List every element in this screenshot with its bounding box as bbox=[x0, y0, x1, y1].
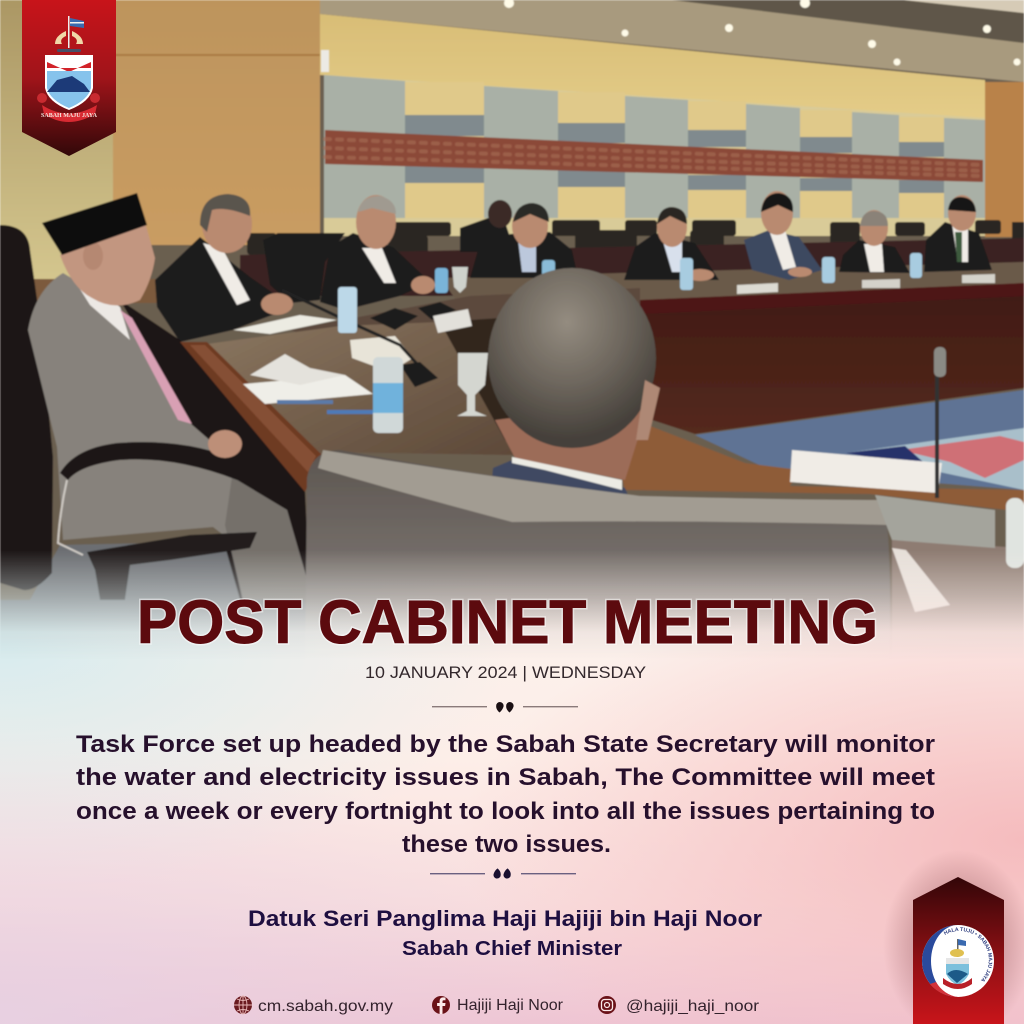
icon: round Hala Tuju emblem bbox=[922, 925, 994, 997]
speaker role: Sabah Chief Minister bbox=[402, 938, 622, 960]
footer: website bbox=[234, 996, 393, 1015]
far table bbox=[240, 238, 1024, 434]
footer: instagram bbox=[598, 996, 760, 1015]
near conference table bbox=[180, 288, 1024, 660]
dark area under near table bbox=[120, 300, 310, 600]
soft gradient background panel bbox=[0, 540, 1024, 1024]
quote text bbox=[76, 731, 935, 858]
foreground man from behind bbox=[488, 268, 660, 500]
top-left red banner with Sabah crest bbox=[22, 0, 116, 156]
opening quote divider bbox=[432, 702, 578, 712]
emblem motto: HALA TUJU • SABAH MAJU JAYA bbox=[944, 927, 992, 982]
documents and objects on table bbox=[233, 253, 995, 433]
quote text: these two issues. bbox=[402, 831, 611, 858]
quote text: the water and electricity issues in Sabah, The Committee will meet bbox=[76, 764, 935, 791]
people in the far row bbox=[155, 191, 992, 342]
footer: facebook: Hajiji Haji Noor bbox=[457, 997, 564, 1014]
icon: state crest bbox=[37, 16, 100, 122]
blue carpet and rug bbox=[0, 390, 1024, 660]
motto: SABAH MAJU JAYA bbox=[41, 113, 98, 119]
seated man in songkok bbox=[0, 193, 308, 600]
rear row of empty chairs bbox=[247, 220, 1024, 257]
carved wood frieze bbox=[325, 130, 983, 182]
microphone and name plate bbox=[790, 347, 1024, 568]
speaker name: Datuk Seri Panglima Haji Hajiji bin Haji Noor bbox=[248, 906, 762, 931]
title: POST CABINET MEETING bbox=[137, 588, 878, 656]
chair back bbox=[0, 225, 53, 590]
foreground chair back bbox=[305, 450, 890, 660]
ceiling lights bbox=[504, 0, 1020, 66]
date line: 10 JANUARY 2024 | WEDNESDAY bbox=[365, 663, 646, 682]
closing quote divider bbox=[430, 868, 576, 879]
face bbox=[60, 222, 155, 306]
title: POST CABINET MEETING bbox=[137, 588, 878, 656]
bottom-right red tab with logo bbox=[890, 858, 1024, 1024]
footer: website: cm.sabah.gov.my bbox=[258, 998, 393, 1015]
quote text: once a week or every fortnight to look into all the issues pertaining to bbox=[76, 798, 935, 825]
suit bbox=[28, 273, 308, 600]
footer: instagram: @hajiji_haji_noor bbox=[626, 998, 760, 1015]
room walls and ceiling bbox=[0, 0, 1024, 660]
quote text: Task Force set up headed by the Sabah State Secretary will monitor bbox=[76, 731, 935, 758]
checkered wall panels bbox=[324, 75, 985, 236]
songkok bbox=[42, 193, 147, 255]
arm rest bbox=[60, 442, 237, 480]
photo: cabinet meeting room bbox=[0, 0, 1024, 660]
